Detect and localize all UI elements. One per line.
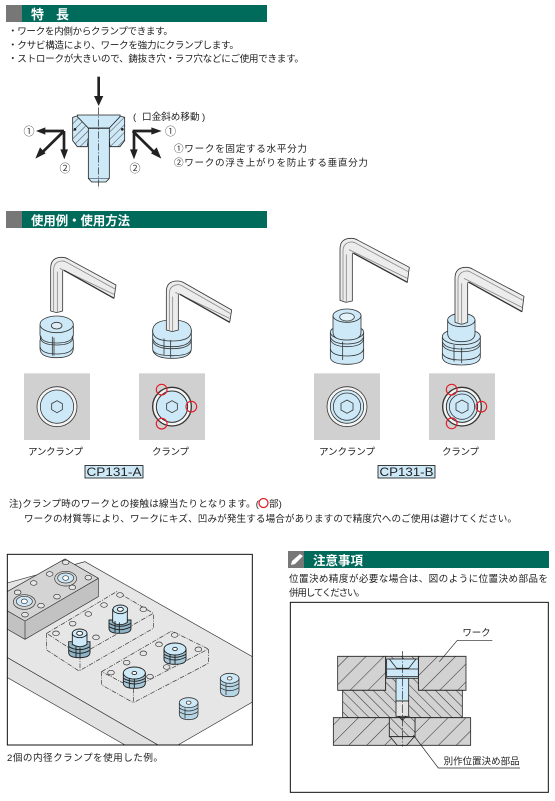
clamp body: [40, 316, 73, 358]
text block: note: 部): [269, 499, 282, 510]
top view: clamped A: [139, 373, 205, 440]
label: CP131-B: CP131-B: [380, 465, 434, 479]
labels: clamp states: アンクランプ: [28, 447, 83, 458]
text block: force legend: [174, 143, 368, 169]
labels: clamp states: アンクランプ: [319, 447, 375, 458]
label: CP131-A: CP131-A: [86, 465, 142, 479]
text block: force legend: ②ワークの浮き上がりを防止する垂直分力: [174, 157, 368, 169]
panel: CP131-B clamp: [442, 267, 524, 365]
label: locating part: 別作位置決め部品: [444, 755, 520, 767]
dashed work block 1: [47, 592, 153, 671]
force number labels: ②: [60, 162, 70, 175]
diagram: wedge clamp force: [24, 77, 368, 189]
middle block: [343, 656, 462, 718]
icon: right force arrows: [130, 127, 162, 159]
text block: cautions: 併用してください。: [289, 587, 365, 599]
text block: features list: ・クサビ構造により、ワークを強力にクランプします。: [8, 40, 239, 52]
clamp body tall expanded: [442, 313, 480, 365]
icon: left force arrows: [35, 127, 68, 159]
heading: cautions: 注意事項: [313, 553, 363, 568]
dashed work block 2: [102, 631, 208, 703]
force number labels: ①: [24, 125, 34, 138]
loose clamps on plate: [179, 673, 239, 720]
base block: [333, 718, 471, 745]
base plate: [0, 562, 260, 745]
text block: note: ワークの材質等により、ワークにキズ、凹みが発生する場合がありますので精度穴へのご使用は避けてください。: [24, 513, 517, 525]
text block: features list: ・ストロークが大きいので、鋳抜き穴・ラフ穴などにご使用できます。: [8, 53, 304, 65]
force number labels: ②: [130, 162, 140, 175]
panel: installation example: [0, 554, 260, 745]
icon: hex key raised: [340, 238, 409, 302]
icon: hex key inserted: [455, 267, 524, 324]
clamp body tall: [330, 309, 364, 364]
text block: note: [9, 498, 517, 525]
work holes: [53, 593, 202, 679]
clamp body expanded: [153, 320, 191, 358]
clamp cross-section: [73, 107, 125, 189]
top view: unclamped B: [314, 373, 380, 440]
caption: example: 2個の内径クランプを使用した例。: [7, 752, 163, 764]
clamps in work block 1: [69, 605, 131, 658]
heading: usage: 使用例・使用方法: [31, 213, 131, 228]
icon: hex key raised: [51, 257, 116, 313]
chart: top views: [24, 373, 205, 440]
heading: features: 特 長: [31, 7, 69, 22]
text block: features list: ・ワークを内側からクランプできます。: [8, 26, 173, 38]
labels: clamp states: クランプ: [442, 447, 479, 458]
clamp section: [387, 651, 418, 747]
top view: unclamped A: [24, 373, 90, 440]
icon: downward force arrow: [94, 77, 103, 106]
heading: cautions: [288, 551, 549, 568]
panel: CP131-A clamp: [153, 281, 232, 358]
locating part: [389, 718, 415, 745]
icon: pencil: [291, 554, 303, 565]
gray block with clamps: [0, 559, 98, 639]
labels: clamp states: クランプ: [152, 447, 189, 458]
callout: jaw movement: 口金斜め移動: [142, 111, 200, 123]
text block: cautions: [289, 573, 548, 599]
callout: jaw movement: ): [202, 112, 205, 123]
icon: hex key inserted: [166, 281, 232, 332]
force number labels: ①: [165, 125, 176, 138]
force number labels: [24, 125, 176, 175]
text block: features list: [8, 26, 304, 65]
heading: features: [6, 5, 267, 22]
panel: CP131-A unclamp: [40, 257, 116, 358]
leader: work: [439, 640, 492, 662]
leader: locating part: [413, 735, 520, 768]
top view: clamped B: [429, 373, 495, 440]
clamps in work block 2: [123, 643, 186, 688]
panel: section drawing: [290, 602, 548, 792]
text block: note: 注)クランプ時のワークとの接触は線当たりとなります。(: [9, 498, 260, 510]
callout: jaw movement: (: [133, 112, 136, 123]
labels: clamp states: [28, 447, 479, 458]
work block: [338, 656, 466, 690]
heading: usage: [6, 211, 267, 228]
text block: force legend: ①ワークを固定する水平分力: [174, 143, 307, 155]
panel: CP131-B unclamp: [330, 238, 409, 364]
label: work: ワーク: [462, 628, 491, 639]
text block: cautions: 位置決め精度が必要な場合は、図のように位置決め部品を: [289, 573, 548, 585]
